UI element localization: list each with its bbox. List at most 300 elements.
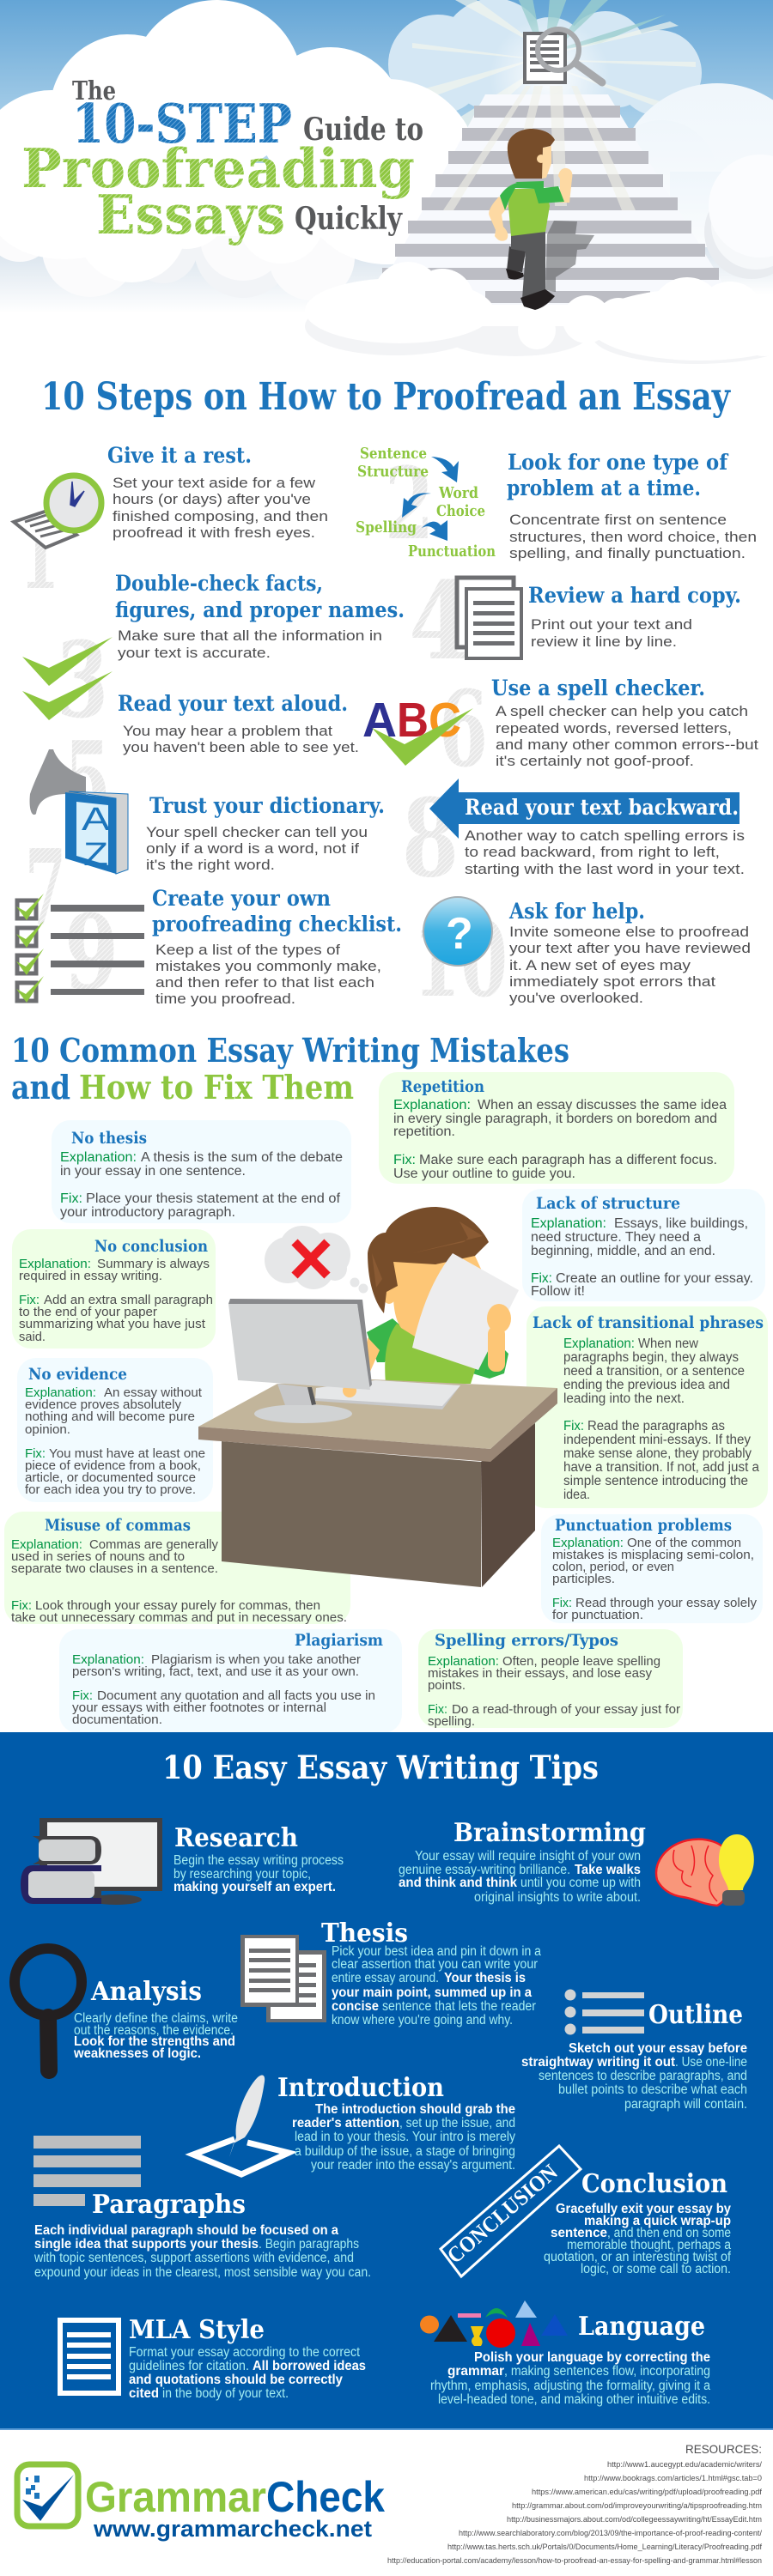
panel: lack of transitional phrases: When new: [638, 1336, 699, 1351]
step 1: give it a rest: [14, 443, 328, 613]
title: 10-STEP: [72, 92, 292, 155]
panel: misuse of commas: Look through your essay purely for commas, then: [35, 1599, 320, 1613]
body text: Print out your text and: [531, 616, 692, 633]
body text: finished composing, and then: [113, 508, 328, 524]
tip: language: [420, 2300, 710, 2407]
tip: introduction: [193, 2073, 515, 2174]
heading: Trust your dictionary.: [149, 793, 385, 818]
right cloud: [606, 83, 773, 286]
heading: Review a hard copy.: [528, 583, 741, 608]
big title cloud: [0, 0, 479, 264]
body text: [123, 723, 359, 755]
panel: spelling errors: Fix:: [428, 1703, 447, 1717]
panel: no thesis: [52, 1120, 351, 1223]
flow diagram: Choice: [436, 502, 485, 520]
tip: language: Language: [578, 2312, 705, 2342]
tip: introduction: a buildup of the issue, a stage of bringing: [295, 2144, 515, 2159]
body text: [509, 512, 757, 561]
tip: language: level-headed tone, and making other intuitive edits.: [438, 2392, 710, 2407]
ghost number 8: 8: [402, 776, 459, 901]
panel: punctuation problems: [541, 1514, 763, 1623]
tip: introduction: , set up the issue, and: [399, 2116, 515, 2131]
tip: thesis: know where you're going and why.: [332, 2013, 513, 2027]
panel: lack of transitional phrases: paragraphs begin, they always: [563, 1350, 739, 1365]
heading: figures, and proper names.: [115, 597, 405, 622]
panel: lack of transitional phrases: Explanation:: [563, 1336, 635, 1351]
body text: [509, 924, 751, 1006]
body text: [118, 627, 382, 661]
body text: [531, 616, 692, 650]
panel: no conclusion: said.: [19, 1330, 46, 1344]
panel: spelling errors: spelling.: [428, 1715, 475, 1729]
icon: bullet list: [565, 1990, 644, 2034]
panel: no thesis: in your essay in one sentence.: [60, 1164, 246, 1179]
body text: hours (or days) after you've: [113, 491, 311, 507]
icon: paper: [14, 511, 76, 548]
body text: Invite someone else to proofread: [509, 924, 749, 940]
panel: no evidence: opinion.: [25, 1423, 70, 1437]
panel: punctuation problems: Read through your essay solely: [575, 1597, 758, 1610]
panel: no conclusion: to the end of your paper: [19, 1306, 157, 1319]
ghost number 7: 7: [25, 826, 66, 949]
tip: conclusion: sentence: [551, 2226, 607, 2240]
tip: MLA style: in the body of your text.: [162, 2386, 289, 2401]
heading: [507, 450, 729, 500]
step 7: trust your dictionary: [25, 791, 385, 949]
body text: [146, 824, 368, 873]
step 5: read aloud: [30, 691, 359, 846]
panel: no evidence: for each idea you try to prove.: [25, 1483, 196, 1497]
panel: lack of transitional phrases: simple sentence introducing the: [563, 1474, 748, 1488]
panel: punctuation problems: Explanation:: [552, 1537, 624, 1550]
tip: conclusion: Gracefully exit your essay by: [556, 2202, 731, 2216]
heading: Read your text backward.: [465, 795, 739, 820]
tip: paragraphs: single idea that supports your thesis: [34, 2237, 259, 2252]
monitor: [228, 1299, 372, 1423]
panel: no evidence: [17, 1358, 213, 1502]
tip: research: Research: [174, 1823, 298, 1853]
title: Quickly: [295, 201, 403, 237]
back cloud with light rays: [388, 0, 702, 137]
step 6: spell checker: [362, 667, 758, 791]
step 4: review a hard copy: [409, 559, 741, 684]
body text: Concentrate first on sentence: [509, 512, 727, 528]
resources list: http://www1.aucegypt.edu/academic/writers/: [607, 2460, 762, 2470]
tip: paragraphs: with topic sentences, support assertions with evidence, and: [33, 2251, 354, 2265]
flow diagram: Word: [438, 484, 478, 502]
student: [364, 1207, 519, 1384]
tip: conclusion: quotation, or an interesting twist of: [544, 2250, 732, 2264]
icon: logo check: [17, 2464, 78, 2526]
panel: punctuation problems: mistakes is misplacing semi-colon,: [552, 1549, 754, 1562]
icon: text bars: [33, 2136, 141, 2206]
panel: spelling errors: Do a read-through of your essay just for: [452, 1703, 680, 1717]
panel: no conclusion: Fix:: [19, 1294, 40, 1307]
panel: lack of transitional phrases: Fix:: [563, 1419, 584, 1433]
title: [21, 76, 423, 246]
panel: no thesis: Explanation:: [60, 1150, 137, 1165]
panel: misuse of commas: Explanation:: [11, 1538, 82, 1552]
illustration: student at desk: [198, 1207, 557, 1587]
panel: no thesis: No thesis: [71, 1129, 147, 1148]
body text: it's certainly not goof-proof.: [496, 753, 694, 769]
body text: [496, 703, 758, 769]
tip: thesis: entire essay around.: [332, 1971, 439, 1985]
tip: introduction: Introduction: [277, 2073, 444, 2103]
panel: punctuation problems: Fix:: [552, 1597, 572, 1610]
heading: Give it a rest.: [107, 443, 252, 468]
body text: review it line by line.: [531, 633, 677, 650]
panel: no evidence: nothing and will become pure: [25, 1410, 195, 1424]
body text: to read backward, from right to left,: [465, 844, 720, 860]
keyboard: [315, 1380, 460, 1409]
tip: brainstorming: genuine essay-writing brilliance.: [399, 1863, 570, 1877]
panel: lack of structure: Essays, like buildings,: [614, 1216, 748, 1231]
panel: lack of transitional phrases: need a transition, or a sentence: [563, 1364, 745, 1379]
panel: plagiarism: person's writing, fact, text, and use it as your own.: [72, 1665, 359, 1679]
body text: and then refer to that list each: [155, 974, 374, 991]
body text: structures, then word choice, then: [509, 529, 757, 545]
body text: [155, 942, 381, 1007]
tip: language: , making sentences flow, incorporating: [504, 2364, 710, 2379]
title: Guide to: [303, 112, 423, 148]
step 3: double-check facts: [22, 571, 405, 742]
panel: no evidence: Fix:: [25, 1447, 46, 1461]
ghost number 1: 1: [20, 492, 59, 613]
resources list: https://www.american.edu/cas/writing/pdf/upload/proofreading.pdf: [532, 2488, 762, 2497]
panel: no conclusion: required in essay writing.: [19, 1270, 162, 1283]
tip: MLA style: All borrowed ideas: [253, 2359, 366, 2373]
icon: checklist: [16, 894, 144, 1003]
tip: MLA style: [60, 2315, 366, 2401]
tip: paragraphs: [33, 2136, 371, 2280]
body text: Your spell checker can tell you: [146, 824, 368, 840]
panel: spelling errors: Spelling errors/Typos: [435, 1631, 618, 1650]
body text: Keep a list of the types of: [155, 942, 340, 958]
heading: tips: 10 Easy Essay Writing Tips: [162, 1749, 599, 1786]
resources list: http://businessmajors.about.com/od/collegeessaywriting/ht/EssayEdit.htm: [507, 2515, 762, 2524]
title: Essays: [96, 183, 285, 246]
tip: outline: Outline: [648, 2000, 743, 2030]
tip: paragraphs: Paragraphs: [92, 2190, 246, 2220]
tip: paragraphs: expound your ideas in the clearest, most sensible way you can.: [34, 2265, 371, 2280]
section: 10 easy essay writing tips: [0, 1732, 773, 2430]
body text: and many other common errors--but: [496, 736, 758, 753]
tip: outline: paragraph will contain.: [624, 2097, 747, 2112]
right cloud shadow: [687, 155, 773, 294]
icon: question mark: [423, 897, 492, 966]
panel: misuse of commas: Fix:: [11, 1599, 32, 1613]
body text: mistakes you commonly make,: [155, 958, 381, 974]
tip: conclusion: [441, 2146, 732, 2276]
panel: no conclusion: summarizing what you have just: [19, 1318, 205, 1331]
body text: proofread it with fresh eyes.: [113, 524, 315, 541]
tip: MLA style: guidelines for citation.: [129, 2359, 249, 2373]
tip: analysis: Look for the strengths and: [74, 2034, 235, 2049]
icon: documents: [457, 578, 521, 658]
staircase: [369, 86, 739, 309]
heading: problem at a time.: [507, 476, 701, 500]
body text: Make sure that all the information in: [118, 627, 382, 644]
tip: language: grammar: [447, 2364, 504, 2379]
thought bubble: [265, 1226, 368, 1293]
panel: lack of transitional phrases: have a transition. If not, add just a: [563, 1460, 759, 1475]
icon: ABC with check: C: [429, 693, 461, 748]
icon: colored shapes: [420, 2300, 568, 2348]
panel: lack of structure: need structure. They need a: [531, 1230, 701, 1245]
panel: no evidence: You must have at least one: [49, 1447, 205, 1461]
panel: repetition: in every single paragraph, it borders on boredom and: [393, 1112, 717, 1126]
tip: brainstorming: Your essay will require insight of your own: [415, 1849, 641, 1864]
panel: repetition: repetition.: [393, 1124, 455, 1139]
tip: research: by researching your topic,: [173, 1867, 311, 1882]
panel: plagiarism: Plagiarism is when you take another: [151, 1653, 361, 1667]
heading: 10 common mistakes: How to Fix Them: [79, 1068, 354, 1106]
resources list: http://www.searchlaboratory.com/blog/2013/09/the-importance-of-proof-reading-content/: [459, 2529, 762, 2538]
icon: document: [60, 2320, 119, 2393]
tip: conclusion: memorable thought, perhaps a: [567, 2238, 731, 2252]
resources list: http://www.tas.herts.sch.uk/Portals/0/Documents/Home_Learning/Literacy/Proofreading.pdf: [447, 2543, 762, 2552]
heading: Read your text aloud.: [118, 691, 348, 716]
panel: no evidence: evidence proves absolutely: [25, 1398, 182, 1412]
panel: lack of transitional phrases: idea.: [563, 1488, 590, 1502]
tip: brainstorming: Brainstorming: [453, 1818, 646, 1848]
tip: thesis: Pick your best idea and pin it down in a: [332, 1944, 541, 1959]
panel: no evidence: An essay without: [104, 1386, 202, 1400]
body text: it. A new set of eyes may: [509, 957, 691, 973]
tip: thesis: concise: [332, 1999, 379, 2014]
icon: clock: [46, 476, 101, 530]
icon: question mark: ?: [446, 909, 473, 959]
ghost number 6: 6: [439, 667, 488, 791]
panel: plagiarism: Document any quotation and all facts you use in: [97, 1689, 375, 1703]
desk: [198, 1379, 557, 1587]
body text: only if a word is a word, not if: [146, 840, 359, 857]
tip: conclusion: logic, or some call to action.: [581, 2262, 731, 2276]
panel: no conclusion: Add an extra small paragraph: [44, 1294, 213, 1307]
panel: no thesis: Place your thesis statement at the end of: [86, 1191, 341, 1206]
panel: spelling errors: Explanation:: [428, 1655, 499, 1669]
tip: introduction: your reader into the essay's argument.: [311, 2158, 515, 2173]
panel: lack of structure: beginning, middle, and an end.: [531, 1244, 715, 1258]
body text: You may hear a problem that: [123, 723, 332, 739]
tip: paragraphs: Each individual paragraph should be focused on a: [34, 2223, 338, 2238]
icon: magnifier: [15, 1949, 82, 2070]
panel: lack of structure: Lack of structure: [536, 1194, 680, 1213]
panel: repetition: When an essay discusses the same idea: [478, 1098, 727, 1112]
tip: conclusion: making a quick wrap-up: [584, 2214, 731, 2228]
heading: Double-check facts,: [115, 571, 323, 596]
ghost number 9: 9: [64, 893, 119, 1014]
heading: 10 common mistakes: and: [11, 1068, 70, 1106]
climbing person: [489, 129, 594, 310]
icon: dictionary: [65, 791, 128, 874]
tip: MLA style: Format your essay according to the correct: [129, 2345, 361, 2360]
panel: plagiarism: your essays with either footnotes or internal: [72, 1701, 326, 1715]
body text: you've overlooked.: [509, 990, 643, 1006]
tip: outline: [521, 1990, 747, 2112]
tip: outline: sentences to describe paragraphs, and: [539, 2069, 747, 2083]
arrow banner: [429, 779, 740, 839]
body text: [113, 475, 328, 541]
tip: analysis: [15, 1949, 238, 2070]
icon: conclusion stamp: CONCLUSION: [442, 2160, 563, 2269]
panel: plagiarism: Plagiarism: [295, 1631, 383, 1650]
icon: check marks: [22, 637, 113, 720]
tip: outline: bullet points to describe what each: [558, 2082, 747, 2097]
tip: outline: Sketch out your essay before: [569, 2041, 747, 2056]
tip: brainstorming: original insights to write about.: [474, 1890, 641, 1905]
resources list: http://grammar.about.com/od/improveyourwriting/a/tipsproofreading.htm: [512, 2501, 762, 2511]
tip: brainstorming: [399, 1818, 754, 1906]
panel: no thesis: Fix:: [60, 1191, 82, 1206]
flow diagram: Spelling: [356, 518, 417, 536]
ghost number 3: 3: [57, 618, 108, 742]
panel: lack of structure: Create an outline for your essay.: [556, 1271, 753, 1286]
tip: outline: . Use one-line: [675, 2055, 747, 2070]
panel: lack of transitional phrases: [526, 1306, 768, 1508]
tip: introduction: The introduction should grab the: [315, 2102, 515, 2117]
panel: spelling errors: [418, 1629, 683, 1729]
logo: GrammarCheck: Grammar: [85, 2473, 266, 2521]
tip: paragraphs: . Begin paragraphs: [259, 2237, 359, 2252]
panel: lack of structure: Fix:: [531, 1271, 552, 1286]
ghost number 10: 10: [413, 900, 508, 1021]
icon: ABC with check: [362, 693, 473, 766]
body text: immediately spot errors that: [509, 973, 715, 990]
panel: no conclusion: [12, 1229, 216, 1349]
panel: no evidence: No evidence: [28, 1365, 127, 1384]
panel: punctuation problems: for punctuation.: [552, 1609, 643, 1622]
panel: plagiarism: documentation.: [72, 1713, 162, 1727]
panel: no thesis: A thesis is the sum of the debate: [141, 1150, 343, 1165]
tip: conclusion: Conclusion: [581, 2169, 727, 2199]
logo: GrammarCheck: [17, 2464, 385, 2542]
ghost number 4: 4: [409, 559, 472, 684]
icon: ABC with check: A: [362, 693, 397, 748]
panel: punctuation problems: One of the common: [627, 1537, 741, 1550]
step 10: ask for help: [413, 897, 751, 1021]
tip: thesis: [240, 1918, 541, 2027]
resources list: [387, 2442, 762, 2566]
heading: [115, 571, 405, 622]
panel: lack of structure: [522, 1189, 765, 1301]
icon: dictionary: Z: [83, 837, 108, 873]
flow diagram: [356, 445, 496, 561]
document and magnifier icon: [525, 29, 602, 82]
step 9: checklist: [16, 886, 402, 1014]
icon: monitor and books: [21, 1818, 162, 1905]
panel: lack of transitional phrases: ending the previous idea and: [563, 1378, 730, 1392]
body text: spelling, and finally punctuation.: [509, 545, 746, 561]
logo: GrammarCheck: Check: [266, 2473, 385, 2521]
heading: [152, 886, 402, 936]
body text: A spell checker can help you catch: [496, 703, 748, 719]
heading: 10 common mistakes: [11, 1031, 569, 1106]
panel: misuse of commas: [4, 1512, 350, 1625]
tip: research: making yourself an expert.: [173, 1880, 336, 1894]
heading: Look for one type of: [508, 450, 729, 475]
body text: Set your text aside for a few: [113, 475, 316, 491]
tip: thesis: clear assertion that you can write your: [332, 1957, 538, 1972]
tip: brainstorming: Take walks: [575, 1863, 641, 1877]
icon: quill: [193, 2076, 289, 2174]
panel: no evidence: article, or documented source: [25, 1471, 196, 1485]
panel: repetition: Make sure each paragraph has a different focus.: [419, 1153, 717, 1167]
tip: introduction: lead in to your thesis. Your intro is merely: [295, 2130, 515, 2144]
panel: lack of transitional phrases: make sense alone, they probably: [563, 1446, 752, 1461]
tip: analysis: Clearly define the claims, write: [74, 2011, 238, 2026]
panel: lack of structure: Explanation:: [531, 1216, 606, 1231]
tip: research: [21, 1818, 344, 1905]
body text: your text after you have reviewed: [509, 940, 751, 956]
panel: repetition: Fix:: [393, 1153, 416, 1167]
panel: misuse of commas: take out unnecessary commas and put in necessary ones.: [11, 1611, 347, 1625]
icon: ABC with check: B: [397, 693, 429, 748]
tip: research: Begin the essay writing process: [173, 1853, 344, 1868]
tip: outline: straightway writing it out: [521, 2055, 675, 2070]
icon: megaphone: [30, 749, 86, 815]
panel: plagiarism: Fix:: [72, 1689, 93, 1703]
heading: Create your own: [152, 886, 331, 911]
heading: proofreading checklist.: [152, 912, 402, 936]
panel: repetition: Repetition: [401, 1077, 484, 1096]
resources list: http://www.bookrags.com/articles/1.html#gsc.tab=0: [584, 2474, 762, 2483]
panel: no conclusion: Summary is always: [97, 1258, 210, 1271]
tip: MLA style: MLA Style: [129, 2315, 265, 2345]
title: The: [72, 76, 116, 106]
panel: misuse of commas: Commas are generally: [89, 1538, 219, 1552]
body text: it's the right word.: [146, 857, 275, 873]
tip: thesis: sentence that lets the reader: [382, 1999, 536, 2014]
panel: lack of transitional phrases: Read the paragraphs as: [587, 1419, 725, 1433]
icon: brain and bulb: [656, 1834, 754, 1906]
tip: MLA style: cited: [129, 2386, 159, 2401]
flow diagram: Sentence: [360, 445, 427, 463]
panel: repetition: [379, 1072, 734, 1184]
panel: no thesis: your introductory paragraph.: [60, 1205, 235, 1220]
tip: conclusion: , and then end on some: [607, 2226, 731, 2240]
tip: language: rhythm, emphasis, adjusting the formality, giving it a: [430, 2379, 710, 2393]
tip: introduction: reader's attention: [292, 2116, 399, 2131]
panel: spelling errors: Often, people leave spelling: [502, 1655, 660, 1669]
panel: no conclusion: No conclusion: [94, 1237, 208, 1256]
tip: language: Polish your language by correcting the: [474, 2350, 710, 2365]
panel: punctuation problems: participles.: [552, 1573, 615, 1586]
flow diagram: Punctuation: [408, 542, 496, 561]
body text: Another way to catch spelling errors is: [465, 827, 745, 844]
lower cloud shadow: [0, 173, 481, 313]
panel: spelling errors: mistakes in their essays, and lose easy: [428, 1667, 653, 1681]
panel: misuse of commas: Misuse of commas: [45, 1516, 191, 1535]
panel: punctuation problems: colon, period, or even: [552, 1561, 674, 1574]
heading: Use a spell checker.: [491, 676, 705, 700]
panel: no conclusion: Explanation:: [19, 1258, 91, 1271]
panel: repetition: Use your outline to guide you.: [393, 1167, 575, 1181]
panel: lack of transitional phrases: leading into the next.: [563, 1391, 685, 1406]
body text: starting with the last word in your text.: [465, 861, 745, 877]
panel: misuse of commas: used in series of nouns and to: [11, 1550, 185, 1564]
ghost number 5: 5: [64, 718, 111, 846]
icon: dictionary: A: [82, 802, 111, 838]
panel: spelling errors: points.: [428, 1679, 466, 1693]
body text: [465, 827, 745, 877]
tip: thesis: Your thesis is: [444, 1971, 526, 1985]
body text: you haven't been able to see yet.: [123, 739, 359, 755]
heading: Ask for help.: [508, 899, 645, 924]
front clouds: [305, 262, 773, 364]
ghost number 2: 2: [385, 446, 434, 562]
